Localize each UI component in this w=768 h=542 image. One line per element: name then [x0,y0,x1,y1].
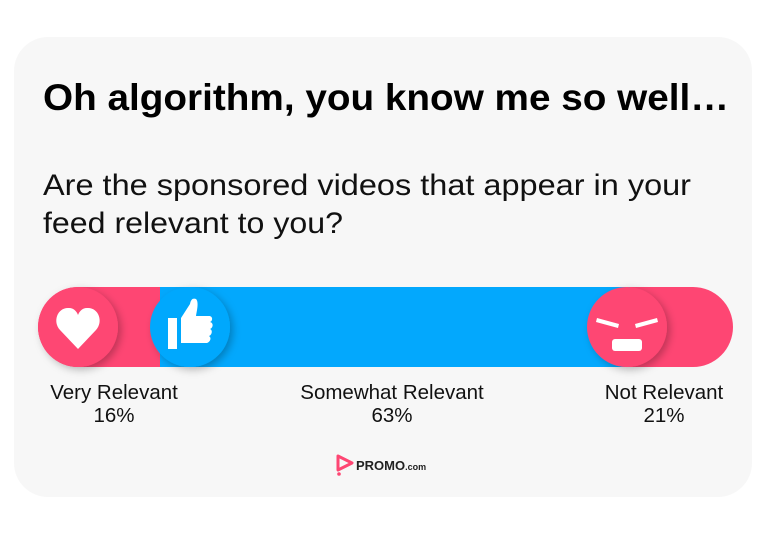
logo: promo.com [337,456,426,476]
bar chart [38,287,733,367]
label: not relevant: Not Relevant [605,381,724,404]
icon: angry face [587,287,667,367]
label: somewhat relevant: Somewhat Relevant [300,381,484,404]
icon: heart [38,287,118,367]
title: Oh algorithm, you know me so well… [43,77,729,118]
question text: Are the sponsored videos that appear in your [43,169,691,202]
label: somewhat relevant: 63% [371,404,413,427]
logo: promo.com: PROMO.com [356,458,426,473]
question text [43,169,691,240]
label: not relevant [605,381,724,427]
label: somewhat relevant [300,381,484,427]
label: very relevant: 16% [93,404,135,427]
label: not relevant: 21% [643,404,685,427]
icon: thumbs up [150,287,230,367]
question text: feed relevant to you? [43,207,343,240]
label: very relevant [50,381,178,427]
label: very relevant: Very Relevant [50,381,178,404]
